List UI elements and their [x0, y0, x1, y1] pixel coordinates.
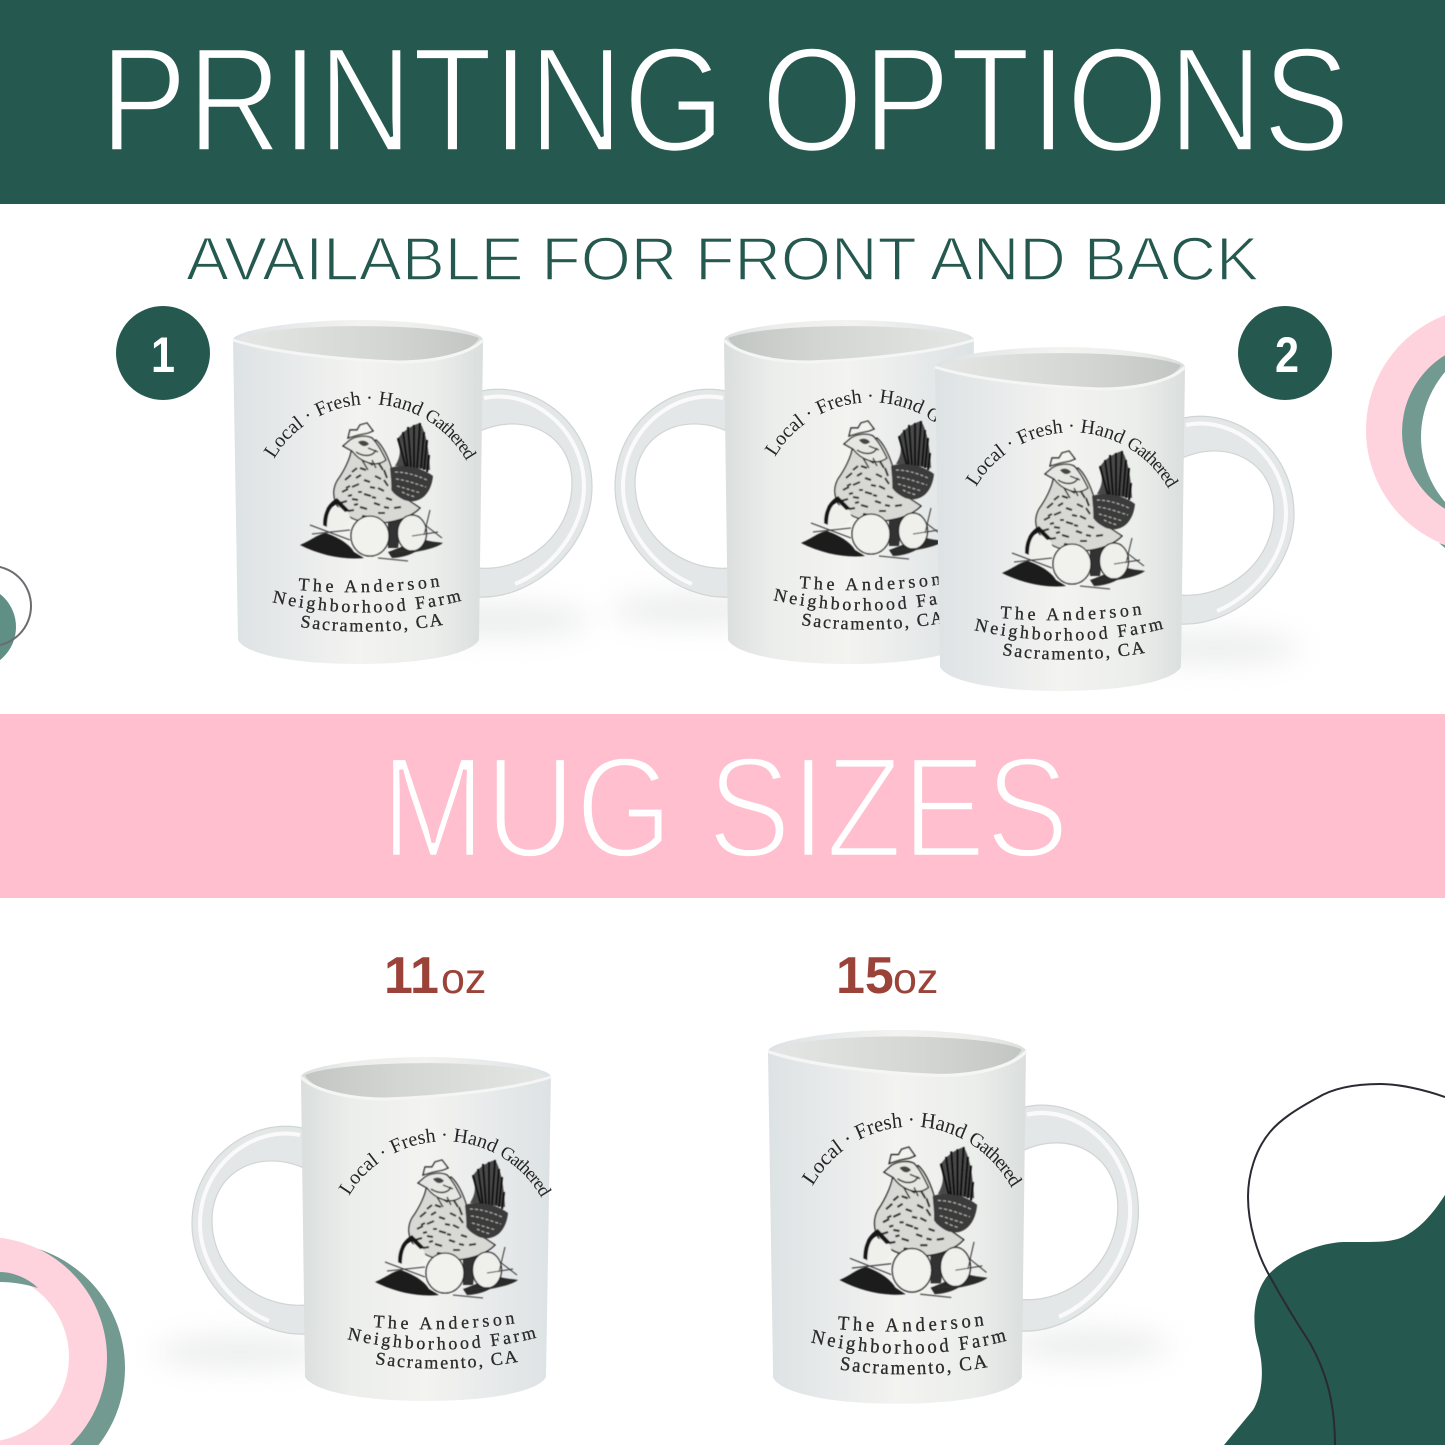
mug 4 print artwork: Neighborhood Farm: [347, 1328, 536, 1350]
mug 2 print artwork: The Anderson: [800, 576, 939, 590]
mug 5 print artwork: Neighborhood Farm: [810, 1330, 1007, 1354]
heading: mug sizes: MUG SIZES: [381, 727, 1069, 888]
mug 3: front view overlapping: [934, 347, 1294, 691]
mug 2: back view handle left: [614, 320, 974, 664]
mug 2 print artwork: Sacramento, CA: [802, 612, 940, 631]
label: 11oz: 11: [384, 947, 439, 1005]
label: 15oz: oz: [893, 955, 938, 1003]
label: 11oz: oz: [441, 955, 486, 1003]
label: 15oz: 15: [836, 947, 894, 1005]
badge: number 1: 1: [151, 327, 175, 383]
mug 1: front print: [233, 320, 592, 664]
mug 5 print artwork: The Anderson: [838, 1316, 984, 1332]
mug 3 print artwork: [965, 420, 1179, 661]
mug 5: 15oz: [768, 1030, 1155, 1404]
mug 1 print artwork: Neighborhood Farm: [272, 590, 462, 613]
mug 4 print artwork: The Anderson: [374, 1315, 515, 1330]
badge: number 2: [1238, 306, 1332, 400]
mug 1 print artwork: The Anderson: [298, 578, 440, 592]
mug 3 print artwork: Sacramento, CA: [1003, 642, 1146, 661]
decoration: bottom right blob and line: [1224, 1084, 1445, 1445]
decoration: right rings: [1366, 307, 1445, 553]
mug 3 print artwork: Local · Fresh · Hand Gathered: [965, 420, 1179, 489]
mug 1 print artwork: [263, 392, 477, 633]
mug 2 print artwork: [764, 390, 940, 631]
badge: number 2: 2: [1275, 327, 1299, 383]
mug 1 print artwork: Sacramento, CA: [301, 614, 444, 633]
badge: number 1: [116, 306, 210, 400]
subtitle: available for front and back: AVAILABLE FOR FRONT AND BACK: [186, 225, 1259, 293]
mug 4 print artwork: Local · Fresh · Hand Gathered: [338, 1128, 552, 1198]
mug 4 print artwork: Sacramento, CA: [376, 1350, 518, 1370]
decoration: left small circles: [0, 566, 31, 669]
banner: mug sizes: [0, 714, 1445, 898]
mug 1 print artwork: Local · Fresh · Hand Gathered: [263, 392, 477, 461]
mug 3 print artwork: Neighborhood Farm: [974, 618, 1164, 641]
mug 2 print artwork: Local · Fresh · Hand Gathered: [764, 390, 936, 456]
mug 2 print artwork: Neighborhood Farm: [773, 588, 938, 611]
mug 4 print artwork: [338, 1128, 552, 1370]
mug 5 print artwork: [802, 1112, 1022, 1376]
mug 4: 11oz: [170, 1057, 552, 1401]
mug 5 print artwork: Sacramento, CA: [840, 1355, 988, 1376]
mug 5 print artwork: Local · Fresh · Hand Gathered: [802, 1112, 1022, 1188]
mug 3 print artwork: The Anderson: [1000, 606, 1142, 620]
decoration: bottom left rings: [0, 1237, 125, 1445]
header banner: printing options: [0, 0, 1445, 204]
